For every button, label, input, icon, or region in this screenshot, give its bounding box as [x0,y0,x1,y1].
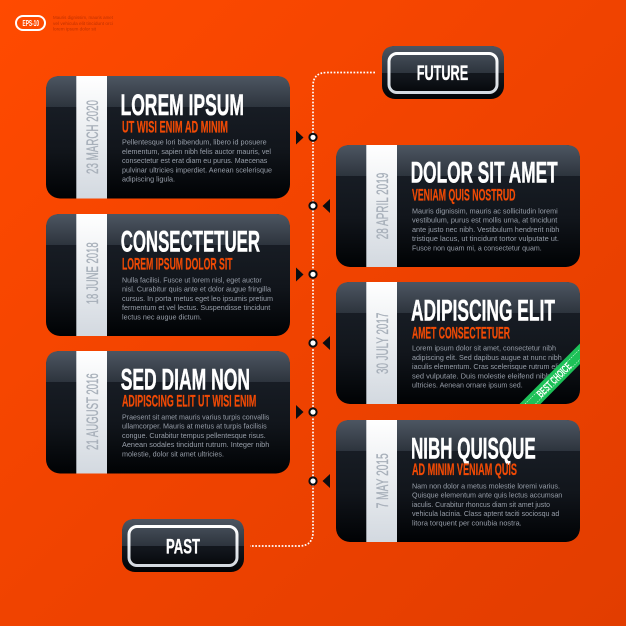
marker: 2019 [309,199,330,213]
panel: dolor sit amet: Mauris dignissim, mauris ac sollicitudin loremi [412,206,558,216]
EPS badge: EPS-10 [22,19,39,28]
button: future: FUTURE [417,61,468,85]
panel: adipiscing elit [336,282,580,404]
panel: sed diam non: ullamcorper. Mauris at metus at turpis facilisis [122,422,267,431]
panel: lorem ipsum: UT WISI ENIM AD MINIM [122,119,228,137]
panel: adipiscing elit: AMET CONSECTETUER [412,324,510,342]
panel: lorem ipsum: 23 MARCH 2020 [84,100,102,174]
panel: lorem ipsum: adipiscing ligula. [122,174,175,184]
panel: dolor sit amet: 28 APRIL 2019 [374,173,392,239]
panel: consectetuer [46,214,290,336]
panel: sed diam non: congue. Curabitur tempus pellentesque risus. [122,431,266,440]
panel: consectetuer: 18 JUNE 2018 [84,242,102,304]
panel: consectetuer: CONSECTETUER [121,226,260,259]
panel: sed diam non: SED DIAM NON [121,363,250,396]
panel: lorem ipsum [46,76,290,198]
panel: adipiscing elit: iaculis elementum. Cras scelerisque rutrum elit [412,362,561,371]
marker: 2016 [296,405,317,419]
panel: lorem ipsum: elementum, sapien nibh felis auctor mauris, vel [122,147,271,156]
panel: adipiscing elit: sed vulputate. Duis molestie eleifend nibh [412,371,550,380]
marker: 2018 [296,268,317,282]
panel: sed diam non: molestie, dolor sit amet ultricies. [122,449,224,458]
panel: consectetuer: LOREM IPSUM DOLOR SIT [122,255,233,273]
panel: lorem ipsum: pulvinar ultricies imperdiet. Aenean scelerisque [122,165,272,174]
panel: lorem ipsum: Pellentesque lori bibendum, libero id posuere [122,138,267,147]
marker: 2017 [309,336,330,350]
panel: adipiscing elit: 30 JULY 2017 [374,313,392,374]
panel: consectetuer: nisl. Curabitur quis ante et dolor augue fringilla [122,285,272,294]
ribbon: best choice [520,344,580,404]
EPS badge [16,16,45,30]
panel: nibh quisque: 7 MAY 2015 [374,453,392,508]
fine print: lorem ipsum dolor sit [53,26,97,32]
button: past [122,519,244,572]
ribbon: best choice: BEST CHOICE [535,361,574,400]
button: future [382,46,504,99]
fine print: Mauris dignissim, mauris amet [53,15,114,20]
panel: dolor sit amet: tristique lacus, ut tincidunt tortor vulputate ut. [412,234,559,243]
timeline markers [296,130,330,488]
marker: 2020 [296,130,317,144]
panel: nibh quisque: Quisque elementum ante quis lectus accumsan [412,491,562,500]
panel: dolor sit amet: ante justo nec nibh. Vestibulum hendrerit nibh [412,225,559,234]
panel: nibh quisque: vehicula lacinia. Class aptent taciti sociosqu ad [412,509,559,518]
panel: dolor sit amet: VENIAM QUIS NOSTRUD [412,187,516,205]
panel: adipiscing elit: ultricies. Aenean ornare ipsum sed. [412,380,523,390]
panel: dolor sit amet [336,145,580,267]
dotted timeline [250,72,375,546]
panel: dolor sit amet: vestibulum, purus est mollis urna, at tincidunt [412,216,557,225]
panel: sed diam non: 21 AUGUST 2016 [84,373,102,450]
panel: nibh quisque: litora torquent per conubia nostra. [412,518,522,527]
marker: 2015 [309,474,330,488]
fine print [53,15,114,32]
panel: nibh quisque: iaculis. Curabitur rhoncus diam sit amet justo [412,500,550,509]
panel: sed diam non: Praesent sit amet mauris varius turpis convallis [122,412,270,422]
panel: nibh quisque: AD MINIM VENIAM QUIS [412,461,517,479]
panel: sed diam non: ADIPISCING ELIT UT WISI ENIM [122,393,256,411]
panel: consectetuer: cursus. In porta metus eget leo ipsumis pretium [122,294,273,303]
button: past: PAST [166,534,200,558]
panel: sed diam non [46,351,290,474]
panel: adipiscing elit: Lorem ipsum dolor sit amet, consectetur nibh [412,344,556,353]
panel: consectetuer: Nulla facilisi. Fusce ut lorem nisl, eget auctor [122,276,262,284]
panel: adipiscing elit: adipiscing elit. Sed dapibus augue at nunc nibh [412,353,562,362]
panel: nibh quisque: NIBH QUISQUE [411,432,536,465]
panel: sed diam non: Aenean sodales tincidunt rutrum. Integer nibh [122,440,269,449]
panel: nibh quisque: Nam non dolor a metus molestie loremi varius. [412,482,560,490]
panel: lorem ipsum: consectetur est erat diam eu purus. Maecenas [122,156,268,165]
fine print: vel vehicula elit tincidunt orci [53,21,113,26]
panel: lorem ipsum: LOREM IPSUM [120,89,244,122]
panel: nibh quisque [336,420,580,542]
panel: consectetuer: fermentum et vel lectus. Suspendisse tincidunt [122,303,270,312]
panel: consectetuer: lectus nec augue dictum. [122,312,202,321]
panel: dolor sit amet: Fusce non quam mi, a consectetur quam. [412,243,542,252]
